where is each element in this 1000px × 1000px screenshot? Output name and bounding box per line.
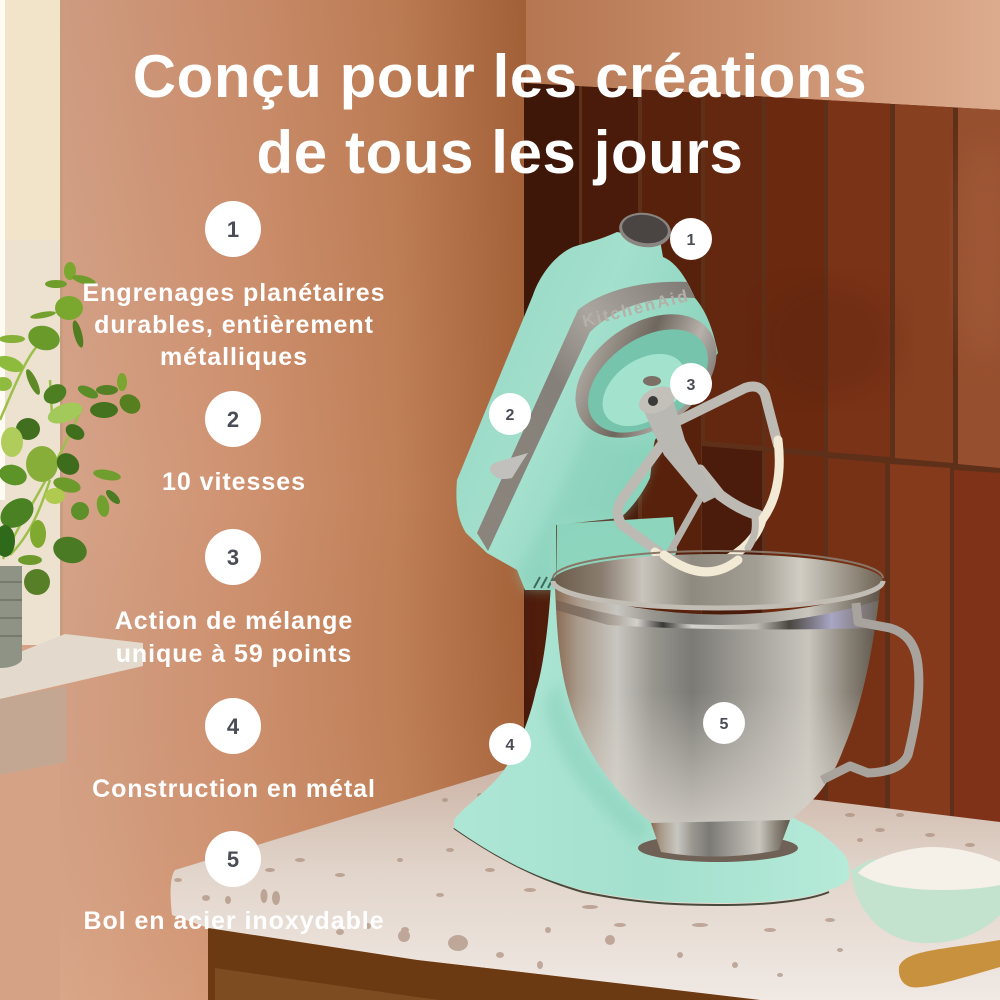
- mixer callout 3: 3: [687, 377, 696, 394]
- bowl handle: [822, 603, 919, 780]
- mixer callout 2: [489, 393, 531, 435]
- speckles: [174, 793, 975, 977]
- window sill: [0, 634, 143, 775]
- shadow under base: [454, 828, 829, 905]
- title: Conçu pour les créations: [133, 43, 867, 110]
- mixer callout 2: 2: [506, 407, 515, 424]
- countertop: [171, 770, 1000, 1000]
- plant: [0, 262, 144, 668]
- feature 5: 5: [227, 847, 239, 872]
- feature 3: [115, 529, 353, 668]
- feature 3: unique à 59 points: [116, 640, 352, 668]
- feature 1: durables, entièrement: [94, 311, 374, 339]
- small dish: [851, 847, 1000, 943]
- feature 5: Bol en acier inoxydable: [83, 907, 385, 935]
- mixer callout 1: [670, 218, 712, 260]
- speed lever: [490, 453, 528, 479]
- top knob: [617, 210, 673, 250]
- mixer base: [454, 583, 850, 903]
- mixer callout 3: [670, 363, 712, 405]
- title: de tous les jours: [257, 119, 743, 186]
- feature 2: [162, 391, 306, 496]
- attachment hub ring: [552, 289, 740, 463]
- mixer head: [456, 232, 718, 590]
- vent: [534, 577, 553, 588]
- feature 2: 10 vitesses: [162, 468, 306, 496]
- feature 1: 1: [227, 217, 239, 242]
- feature 1: Engrenages planétaires: [83, 279, 385, 307]
- mixer neck: [556, 517, 677, 600]
- plant stems: [0, 345, 82, 559]
- mixer callout 1: 1: [687, 232, 696, 249]
- feature 1: métalliques: [160, 343, 308, 371]
- beater shaft: [635, 376, 716, 503]
- bowl interior: [553, 551, 883, 608]
- wood cabinet: [208, 928, 760, 1000]
- bowl body: [555, 588, 880, 823]
- mixer callout 5: 5: [720, 716, 729, 733]
- feature 3: Action de mélange: [115, 607, 353, 635]
- beater frame: [618, 387, 779, 573]
- feature 4: Construction en métal: [92, 775, 376, 803]
- wooden spoon: [899, 940, 1000, 987]
- foam over bowl: [664, 555, 738, 572]
- feature list: [83, 201, 385, 935]
- terracotta tile wall: [520, 80, 1000, 830]
- plant pot: [0, 566, 22, 668]
- title: [133, 43, 867, 186]
- window frame: [0, 0, 143, 775]
- feature 4: [92, 698, 376, 803]
- stand mixer: [454, 210, 1000, 987]
- badge text: KitchenAid: [580, 286, 691, 331]
- chrome band: [477, 282, 695, 551]
- mixer callout 4: [489, 723, 531, 765]
- feature 4: 4: [227, 714, 240, 739]
- mixer callout 5: [703, 702, 745, 744]
- feature 1: [83, 201, 385, 371]
- feature 3: 3: [227, 545, 239, 570]
- feature 2: 2: [227, 407, 239, 432]
- bowl foot: [638, 820, 798, 862]
- leaves: [0, 262, 144, 595]
- mixer callout 4: 4: [506, 737, 515, 754]
- feature 5: [83, 831, 385, 935]
